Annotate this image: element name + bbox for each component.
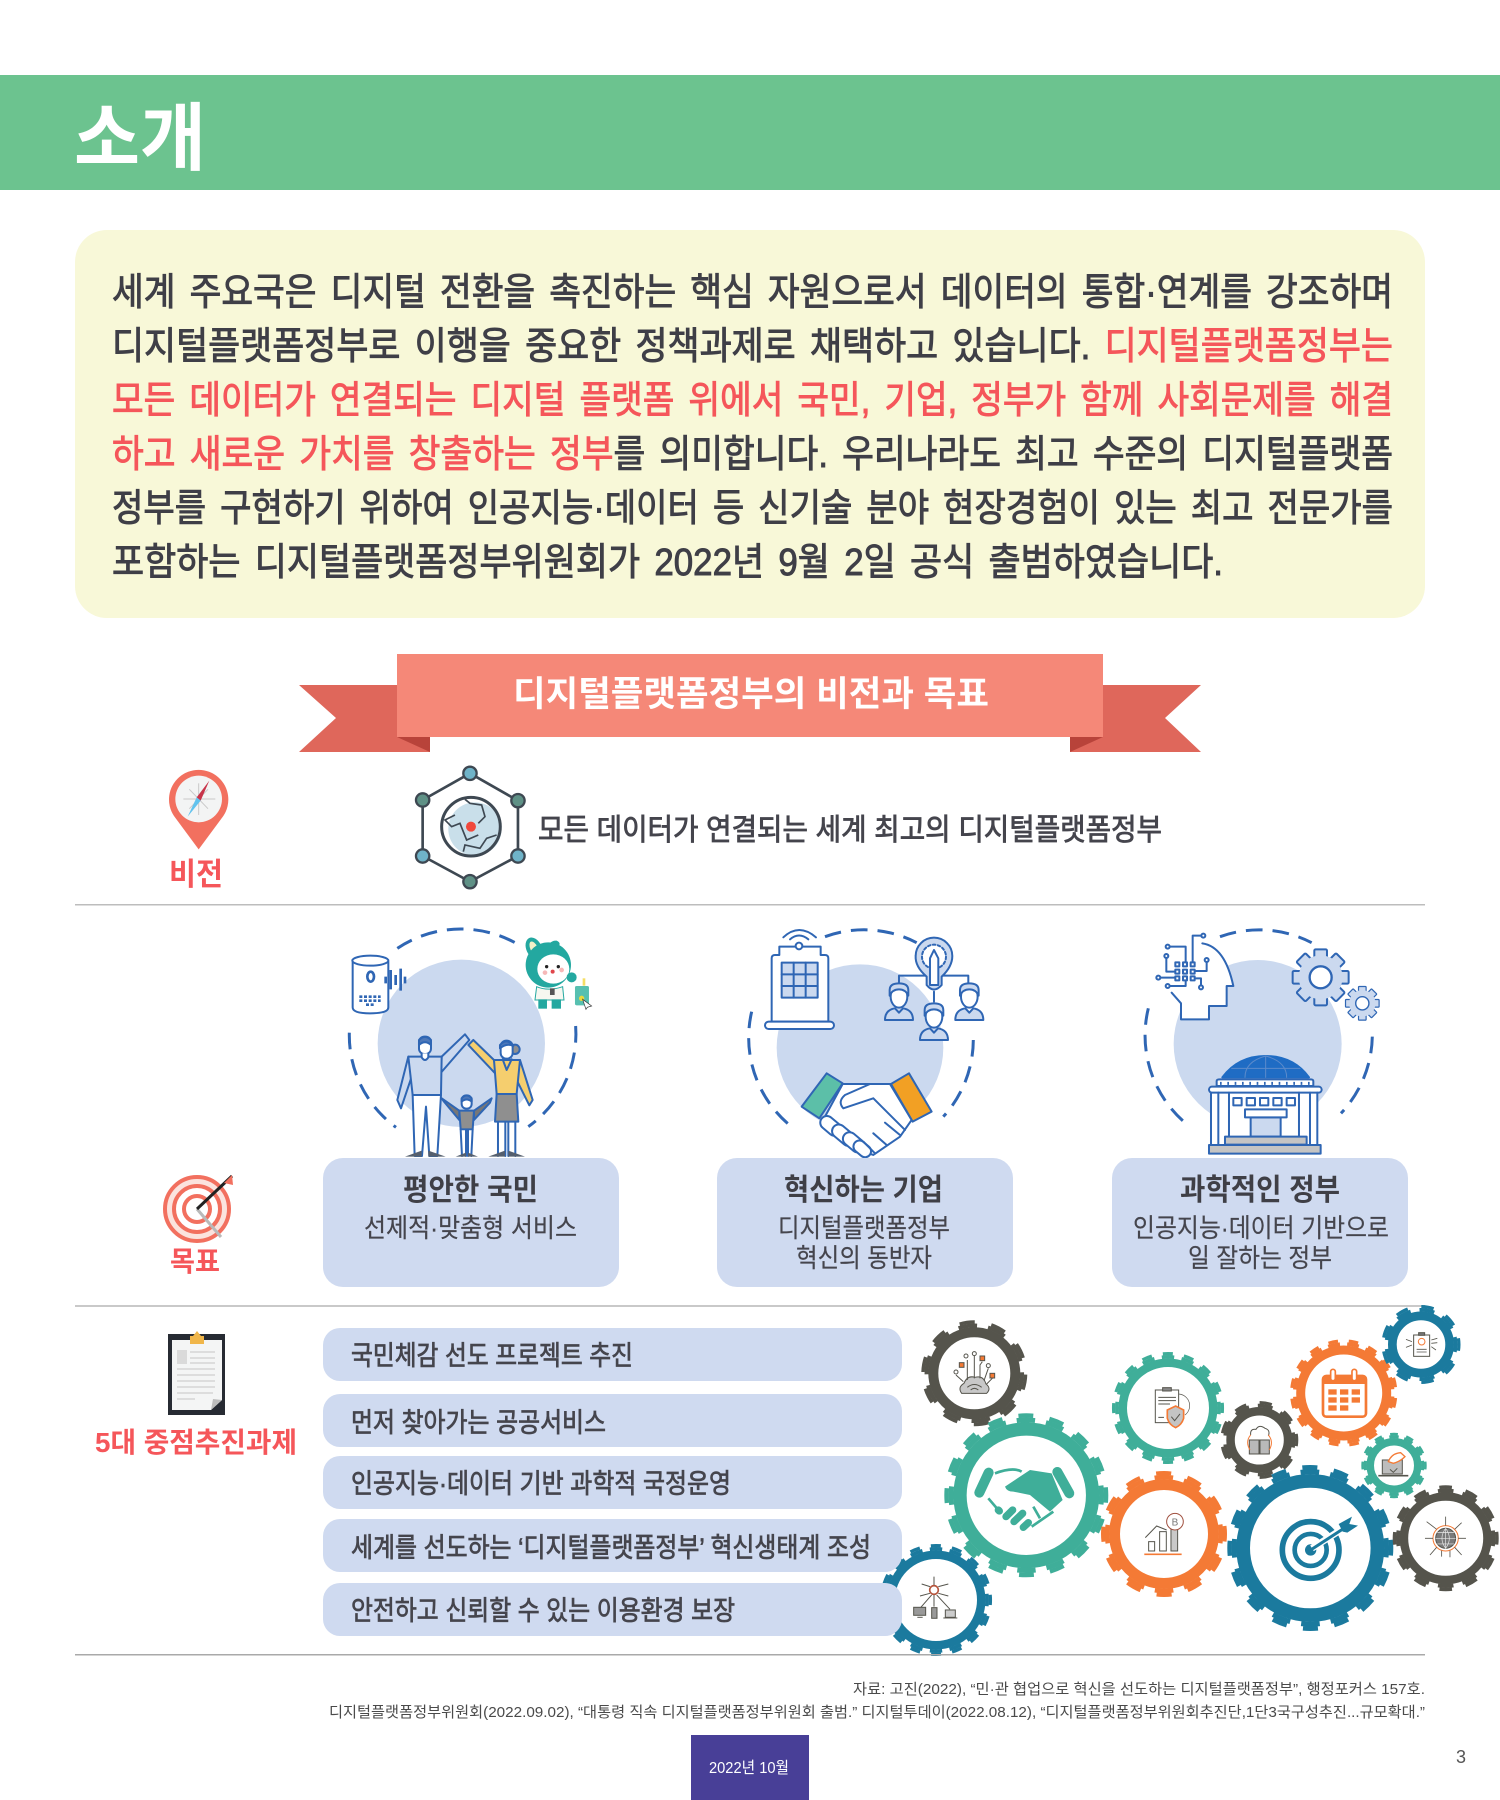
gear: cloud book bbox=[1222, 1402, 1297, 1478]
task 1: 국민체감 선도 프로젝트 추진 bbox=[351, 1341, 633, 1371]
task 1 bbox=[323, 1328, 902, 1381]
paragraph line 1: 세계 주요국은 디지털 전환을 촉진하는 핵심 자원으로서 데이터의 통합·연계를 강조하며 bbox=[112, 272, 1393, 314]
gear: chart: B bbox=[1172, 1517, 1179, 1528]
paragraph line 2: 디지털플랫폼정부로 이행을 중요한 정책과제로 채택하고 있습니다. 디지털플랫폼정부는 bbox=[112, 326, 1393, 368]
icon: target bbox=[165, 1175, 233, 1241]
figure: family bbox=[397, 1034, 533, 1156]
ribbon heading bbox=[299, 654, 1201, 752]
icon: clipboard bbox=[168, 1331, 225, 1415]
goal illustration: citizens bbox=[349, 929, 592, 1157]
ribbon heading: 디지털플랫폼정부의 비전과 목표 bbox=[513, 675, 989, 714]
gear: globe bbox=[1394, 1487, 1497, 1590]
tasks heading: 5대 중점추진과제 bbox=[95, 1427, 297, 1458]
goal illustration: government bbox=[1145, 930, 1379, 1154]
paragraph line 5: 정부를 구현하기 위하여 인공지능·데이터 등 신기술 분야 현장경험이 있는 최고 전문가를 bbox=[112, 488, 1393, 530]
gear: handshake bbox=[947, 1416, 1106, 1575]
vision heading: 비전 bbox=[169, 857, 223, 892]
title: 소개 bbox=[74, 97, 206, 180]
goal card: government: 일 잘하는 정부 bbox=[1188, 1243, 1332, 1273]
task 4 bbox=[323, 1519, 902, 1572]
source note: 디지털플랫폼정부위원회(2022.09.02), “대통령 직속 디지털플랫폼정부위원회 출범.” 디지털투데이(2022.08.12), “디지털플랫폼정부위원회추진단,1단3국구성추진...규모확대.” bbox=[329, 1704, 1425, 1721]
tasks label bbox=[95, 1331, 297, 1458]
task 5 bbox=[323, 1583, 902, 1636]
paragraph line 6: 포함하는 디지털플랫폼정부위원회가 2022년 9월 2일 공식 출범하였습니다. bbox=[112, 542, 1223, 584]
gear: chart bbox=[1103, 1473, 1225, 1595]
goal card: citizens: 평안한 국민 bbox=[403, 1174, 538, 1207]
goal card: enterprises: 혁신하는 기업 bbox=[784, 1174, 943, 1207]
goal card: citizens bbox=[323, 1158, 619, 1287]
goal card: government: 인공지능·데이터 기반으로 bbox=[1133, 1213, 1389, 1243]
icon: AI head bbox=[1156, 934, 1233, 1019]
source note bbox=[329, 1681, 1425, 1721]
gear: cloud bbox=[915, 1314, 1034, 1433]
source note: 자료: 고진(2022), “민·관 협업으로 혁신을 선도하는 디지털플랫폼정부”, 행정포커스 157호. bbox=[853, 1681, 1425, 1698]
task list bbox=[323, 1328, 902, 1636]
date tab bbox=[691, 1735, 809, 1800]
icon: handshake bbox=[802, 1073, 932, 1160]
icon: idea team bbox=[899, 938, 968, 1002]
goal card: government: 과학적인 정부 bbox=[1180, 1174, 1340, 1207]
task 2 bbox=[323, 1394, 902, 1447]
vision label bbox=[169, 770, 228, 892]
gear: document shield bbox=[1114, 1354, 1222, 1462]
gear: target bbox=[1230, 1467, 1391, 1629]
panel: introduction bbox=[75, 230, 1425, 618]
task 3: 인공지능·데이터 기반 과학적 국정운영 bbox=[351, 1469, 731, 1499]
task 2: 먼저 찾아가는 공공서비스 bbox=[351, 1408, 606, 1438]
goal card: enterprises: 디지털플랫폼정부 bbox=[778, 1213, 950, 1243]
goal card: enterprises: 혁신의 동반자 bbox=[796, 1243, 932, 1273]
gear: calendar bbox=[1283, 1332, 1405, 1454]
gear: laptop bbox=[1363, 1434, 1425, 1497]
goal card: government bbox=[1112, 1158, 1408, 1287]
icon: smart speaker bbox=[352, 956, 405, 1013]
paragraph line 3: 모든 데이터가 연결되는 디지털 플랫폼 위에서 국민, 기업, 정부가 함께 사회문제를 해결 bbox=[112, 380, 1393, 422]
task 5: 안전하고 신뢰할 수 있는 이용환경 보장 bbox=[351, 1596, 735, 1626]
goal heading: 목표 bbox=[170, 1246, 220, 1277]
icon: data hexagon globe bbox=[416, 767, 525, 888]
gear: network devices bbox=[882, 1546, 990, 1654]
task 3 bbox=[323, 1456, 902, 1509]
page number: 3 bbox=[1456, 1747, 1466, 1767]
goal card: enterprises bbox=[717, 1158, 1013, 1287]
goal label bbox=[165, 1175, 233, 1277]
icon: rabbit mascot bbox=[522, 935, 592, 1009]
header band bbox=[0, 75, 1500, 190]
paragraph line 4: 하고 새로운 가치를 창출하는 정부를 의미합니다. 우리나라도 최고 수준의 디지털플랫폼 bbox=[112, 434, 1393, 476]
goal card: citizens: 선제적·맞춤형 서비스 bbox=[364, 1213, 577, 1243]
icon: building bbox=[765, 930, 834, 1029]
icon: compass pin bbox=[169, 770, 228, 849]
task 4: 세계를 선도하는 ‘디지털플랫폼정부’ 혁신생태계 조성 bbox=[351, 1533, 871, 1563]
icon: cogs bbox=[1293, 949, 1349, 1005]
goal illustration: enterprises bbox=[749, 930, 983, 1160]
gear cluster bbox=[882, 1307, 1497, 1654]
gear: report bbox=[1383, 1307, 1459, 1382]
vision statement: 모든 데이터가 연결되는 세계 최고의 디지털플랫폼정부 bbox=[538, 814, 1162, 847]
date tab: 2022년 10월 bbox=[709, 1759, 789, 1777]
icon: national assembly building bbox=[1209, 1056, 1322, 1154]
